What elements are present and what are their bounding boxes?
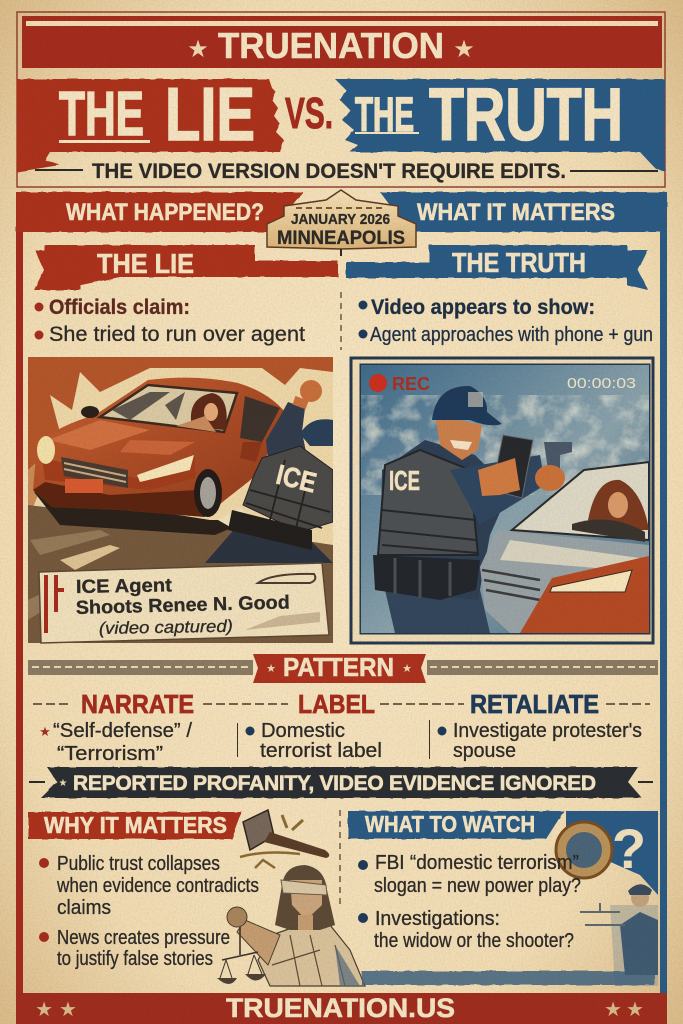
ribbon: the truth xyxy=(346,245,648,290)
vest xyxy=(378,450,478,555)
caption card: (video captured) xyxy=(99,617,233,638)
red half xyxy=(17,79,284,172)
legs xyxy=(205,531,333,563)
column: label: terrorist label xyxy=(260,740,382,762)
bullet: news: to justify false stories xyxy=(57,948,213,970)
icon: gavel xyxy=(240,810,329,868)
wheel xyxy=(194,469,222,517)
rec indicator xyxy=(369,374,387,392)
masthead: TRUENATION: ★ xyxy=(453,36,475,63)
side window xyxy=(240,396,280,442)
column: retaliate: Investigate protester's xyxy=(453,720,642,742)
bullet: news: News creates pressure xyxy=(57,927,230,949)
hand xyxy=(478,458,520,496)
illustration: car driving at agent xyxy=(28,357,333,643)
face xyxy=(436,420,482,460)
date plaque: JANUARY 2026 xyxy=(291,211,390,228)
neck xyxy=(298,915,313,930)
main panel frame xyxy=(16,192,667,1002)
masthead: TRUENATION xyxy=(17,12,665,187)
footer: TRUENATION.US xyxy=(226,993,455,1023)
wordmark: TRUENATION xyxy=(218,25,444,66)
caption card xyxy=(39,563,329,643)
column: retaliate: RETALIATE xyxy=(470,689,599,719)
seal xyxy=(556,822,612,878)
stars right: ★★ xyxy=(604,999,648,1021)
column: narrate xyxy=(39,689,194,765)
heading: WHAT TO WATCH xyxy=(365,811,535,837)
bottom strip xyxy=(362,971,655,985)
panel: what to watch xyxy=(348,811,658,986)
truth bullets: Video appears to show: xyxy=(371,296,595,319)
cap xyxy=(432,386,502,425)
header: what happened xyxy=(16,192,303,232)
car body xyxy=(33,378,285,517)
header: what happened: WHAT HAPPENED? xyxy=(66,199,264,226)
ribbon: the truth: THE TRUTH xyxy=(452,247,586,278)
evidence ribbon xyxy=(29,767,653,798)
dust xyxy=(218,508,248,526)
question mark: ? xyxy=(612,817,646,880)
illustration: bodycam video frame: REC xyxy=(392,374,430,394)
bullet: investigations xyxy=(358,908,574,952)
headlight xyxy=(550,570,632,592)
lower lip xyxy=(33,482,205,517)
belt xyxy=(373,555,480,600)
header: what it matters xyxy=(380,192,667,232)
scales xyxy=(217,927,266,984)
phone xyxy=(492,435,533,498)
ribbon: the lie xyxy=(34,245,338,290)
agent xyxy=(205,380,333,563)
hood xyxy=(480,530,649,633)
blue wash xyxy=(566,811,658,986)
THE: THE xyxy=(355,89,414,142)
mirror xyxy=(81,406,99,418)
pattern heading: ★ xyxy=(402,663,412,675)
VS: VS. xyxy=(285,89,333,138)
driver xyxy=(191,393,227,430)
arm xyxy=(237,920,280,965)
column: narrate: “Self-defense” / xyxy=(53,720,192,742)
bullet: public trust xyxy=(39,853,259,919)
belt xyxy=(228,510,312,550)
caption card: Shoots Renee N. Good xyxy=(76,592,290,619)
column: label: Domestic xyxy=(261,720,345,742)
agent legs xyxy=(385,590,490,633)
bullet: public trust: claims xyxy=(57,897,111,919)
bullet: fbi: slogan = new power play? xyxy=(374,875,581,897)
vest label: ICE xyxy=(389,465,420,496)
driver xyxy=(588,480,649,530)
lie bullets xyxy=(34,296,305,346)
date plaque xyxy=(267,190,416,256)
road shadow xyxy=(34,492,250,535)
grille xyxy=(61,457,128,488)
pattern heading: PATTERN xyxy=(283,652,394,682)
lie bullets: Officials claim: xyxy=(49,296,190,319)
pattern columns xyxy=(33,689,650,765)
column: retaliate: spouse xyxy=(453,740,516,762)
bullet: news xyxy=(39,927,230,970)
column: narrate: ★ xyxy=(39,724,51,739)
hood highlight xyxy=(48,420,150,450)
LIE: LIE xyxy=(165,72,255,156)
column: retaliate xyxy=(429,689,642,762)
lie bullets: She tried to run over agent xyxy=(49,323,305,346)
bullet: investigations: Investigations: xyxy=(375,908,500,930)
extended arm xyxy=(450,455,545,525)
column: label: LABEL xyxy=(298,689,375,719)
car roof and glass xyxy=(512,462,649,540)
caption card: ICE Agent xyxy=(76,575,173,598)
windshield xyxy=(100,385,237,432)
bullet: fbi xyxy=(358,852,581,897)
headline banner: the lie vs the truth xyxy=(17,72,665,172)
pattern heading xyxy=(28,652,658,683)
hair xyxy=(275,865,335,930)
torso xyxy=(382,440,500,598)
evidence ribbon: ★ xyxy=(59,778,68,789)
grille xyxy=(482,570,540,600)
evidence ribbon: REPORTED PROFANITY, VIDEO EVIDENCE IGNORED xyxy=(73,772,596,795)
bullet: public trust: Public trust collapses xyxy=(57,853,220,875)
fist xyxy=(227,907,247,927)
road xyxy=(28,505,333,643)
blue half xyxy=(335,79,665,172)
vest label: ICE xyxy=(273,459,320,499)
timestamp: 00:00:03 xyxy=(567,375,636,392)
illustration: bodycam video frame xyxy=(351,358,653,643)
bullet: public trust: when evidence contradicts xyxy=(56,875,259,897)
column: narrate: NARRATE xyxy=(81,689,194,719)
TRUTH: TRUTH xyxy=(429,73,623,156)
tagline: THE VIDEO VERSION DOESN'T REQUIRE EDITS. xyxy=(92,160,566,183)
stars left: ★★ xyxy=(35,999,83,1021)
column: narrate: “Terrorism” xyxy=(57,743,163,765)
panel: why it matters xyxy=(28,812,259,970)
vest xyxy=(243,446,333,532)
truth bullets xyxy=(358,296,653,346)
illustration: lady justice xyxy=(217,865,365,986)
headlights xyxy=(137,455,194,482)
bullet: fbi: FBI “domestic terrorism” xyxy=(375,852,579,874)
blade icon xyxy=(258,574,315,583)
date plaque: MINNEAPOLIS xyxy=(277,228,405,249)
fist xyxy=(300,380,322,402)
mark xyxy=(46,575,64,633)
front face xyxy=(42,456,195,490)
plate xyxy=(65,479,103,493)
header: what it matters: WHAT IT MATTERS xyxy=(417,199,615,226)
truth bullets: Agent approaches with phone + gun xyxy=(370,324,653,346)
red front xyxy=(520,556,649,633)
centre divider xyxy=(340,292,342,350)
gun hand and gun xyxy=(544,442,572,470)
ribbon: the lie: THE LIE xyxy=(97,248,194,279)
footer xyxy=(16,993,667,1024)
cap xyxy=(300,419,333,446)
arm xyxy=(266,402,306,460)
mottled wall xyxy=(361,395,649,495)
heading: WHY IT MATTERS xyxy=(44,812,227,838)
bullet: investigations: the widow or the shooter? xyxy=(374,930,574,952)
officer xyxy=(580,884,658,975)
blindfold xyxy=(281,880,327,895)
THE: THE xyxy=(59,80,144,149)
column: label xyxy=(237,689,382,762)
panel divider xyxy=(339,810,341,906)
burst xyxy=(28,357,333,470)
robe xyxy=(258,925,365,986)
pattern heading: ★ xyxy=(266,663,276,675)
face xyxy=(290,880,322,920)
stars: ★ xyxy=(187,36,209,63)
